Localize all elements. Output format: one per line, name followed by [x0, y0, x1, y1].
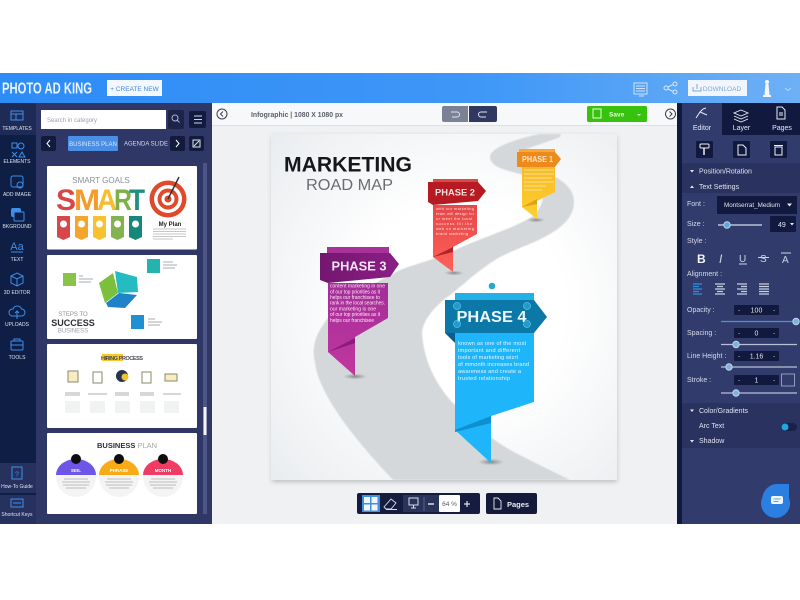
canvas workspace: [212, 103, 682, 524]
opacity control: 100: [751, 308, 762, 314]
opacity control: Opacity :: [687, 307, 715, 314]
stroke control: [687, 374, 797, 396]
alignment row: [687, 271, 769, 294]
thumbnail: hiring process: HIRING PROCESS: [101, 356, 143, 362]
thumbnail: smart goals: T: [129, 184, 145, 217]
font row: [687, 196, 797, 214]
line height control: [687, 351, 797, 370]
rail item: shortcut keys: [0, 495, 36, 524]
thumbnail: smart goals: [47, 166, 197, 250]
scrollbar: [203, 163, 207, 514]
style row: U: [739, 254, 746, 265]
download button: DOWNLOAD: [703, 86, 741, 93]
rail item: 3d editor: 3D EDITOR: [4, 290, 31, 296]
tab: pages: Pages: [772, 125, 792, 132]
thumbnail: smart goals: A: [97, 184, 117, 217]
undo button: [442, 106, 468, 122]
icon: chevron: [785, 88, 791, 90]
thumbnail: business plan: PHRASE: [110, 468, 128, 473]
section headers: [682, 163, 800, 193]
spacing control: 0: [755, 330, 759, 338]
rail item: templates: [2, 111, 32, 132]
phase 2 marker: [428, 179, 486, 276]
tab: editor: Editor: [693, 125, 712, 132]
prev arrow: [41, 136, 56, 151]
rail item: tools: TOOLS: [9, 355, 26, 361]
thumbnail: steps to success: [47, 255, 197, 339]
top header bar: [0, 73, 800, 103]
redo button: [469, 106, 497, 122]
style row: I: [719, 252, 723, 266]
phase 3 marker: PHASE 3: [332, 258, 386, 274]
phase 4 marker: [445, 283, 547, 466]
phase 3 marker: helps our franchisee to: [330, 295, 380, 301]
tabs: [693, 103, 800, 135]
color and shadow sections: Color/Gradients: [699, 408, 749, 415]
thumbnail: business plan: BUSINESS PLAN: [97, 441, 157, 450]
rail item: text: TEXT: [11, 257, 23, 263]
icon: share: [664, 82, 677, 94]
phase 2 marker: team will design for: [436, 211, 475, 216]
pages button: Pages: [507, 500, 529, 509]
back button: [217, 109, 227, 119]
stroke control: -: [773, 378, 776, 384]
search button: [168, 110, 184, 129]
font row: Montserrat_Medium: [724, 202, 780, 209]
style row: B: [697, 252, 706, 266]
thumbnail: hiring process: [47, 344, 197, 428]
canvas toolbar: [212, 103, 677, 126]
template panel: [36, 103, 212, 524]
category tab active: BUSINESS PLAN: [69, 142, 117, 148]
thumbnail: business plan: [47, 433, 197, 514]
phase 3 marker: our marketing is one: [330, 306, 376, 312]
size row: [687, 216, 796, 232]
phase 4 marker: known as one of the most: [458, 341, 526, 347]
line height control: -: [773, 354, 776, 360]
phase 3 marker: of our top priorities as it: [330, 290, 381, 296]
color and shadow sections: [682, 403, 800, 448]
infographic card: [271, 134, 617, 482]
phase 3 marker: of our top priorities as it: [330, 312, 381, 318]
tool: copy: [733, 141, 750, 158]
thumbnail: smart goals: M: [74, 184, 100, 217]
rail item: uploads: UPLOADS: [5, 322, 30, 328]
presentation icon: [403, 495, 453, 512]
bottom zoom toolbar: [357, 493, 537, 514]
forward button: [666, 109, 676, 119]
phase 2 marker: PHASE 2: [435, 188, 475, 198]
create new button: [107, 80, 162, 96]
next arrow: [170, 136, 185, 151]
phase 4 marker: of mmonth increases brand: [458, 362, 529, 368]
right properties panel: [682, 103, 800, 524]
resize button: [189, 136, 204, 151]
thumbnail: smart goals: S: [56, 184, 76, 217]
phase 1 marker: PHASE 1: [522, 155, 553, 164]
zoom value: [439, 495, 460, 512]
opacity control: [687, 305, 799, 325]
phase 4 marker: important and different: [458, 348, 520, 354]
title: MARKETING: [284, 152, 412, 176]
phase 3 marker: content marketing in one: [330, 284, 385, 290]
thumbnail: smart goals: My Plan: [159, 222, 182, 228]
icon: comments: [634, 83, 647, 96]
save button: [587, 106, 647, 122]
opacity control: -: [738, 308, 741, 314]
tool: delete: [770, 141, 787, 158]
spacing control: -: [773, 330, 776, 338]
section headers: Text Settings: [699, 184, 740, 191]
phase 3 marker: rank in the local searches.: [330, 300, 385, 306]
save button: Save: [609, 112, 625, 118]
stroke control: -: [738, 378, 741, 384]
thumbnail: steps to success: STEPS TO: [58, 312, 88, 318]
opacity control: -: [773, 308, 776, 314]
rail item: how-to guide: [0, 463, 36, 493]
thumbnail: smart goals: SMART GOALS: [72, 176, 130, 185]
zoom out: [428, 503, 434, 505]
category tab active: [68, 136, 118, 151]
thumbnail: business plan: MONTH: [155, 468, 171, 473]
phase 1 marker: [517, 149, 561, 222]
winding road: [314, 134, 574, 480]
phase 4 marker: awareness and create a: [458, 369, 522, 375]
rail item: templates: TEMPLATES: [2, 126, 32, 132]
rail item: tools: [9, 339, 26, 361]
rail item: background: BKGROUND: [3, 224, 32, 230]
thumbnail: steps to success: SUCCESS: [51, 318, 95, 328]
section headers: Position/Rotation: [699, 168, 752, 176]
left icon rail: [0, 103, 36, 524]
phase 4 marker: trusted relationship: [458, 376, 510, 382]
line height control: -: [738, 354, 741, 360]
rail item: uploads: [5, 306, 30, 328]
stroke control: 1: [755, 378, 759, 384]
rail item: shortcut keys: Shortcut Keys: [1, 512, 33, 518]
alignment row: Alignment :: [687, 271, 722, 278]
style row: A: [782, 255, 789, 266]
spacing control: [687, 328, 797, 348]
list button: [189, 111, 206, 128]
phase 2 marker: success fill the: [436, 221, 472, 226]
phase 3 marker: [320, 247, 399, 380]
rail item: add image: ADD IMAGE: [3, 192, 32, 198]
phase 2 marker: web on marketing: [436, 226, 474, 231]
selection handles: [454, 302, 530, 328]
style row: S: [760, 254, 767, 265]
chat button: [761, 484, 790, 518]
stroke control: Stroke :: [687, 377, 711, 384]
eraser icon: [384, 499, 397, 510]
thumbnail: smart goals: R: [114, 184, 132, 217]
tool: paint roller: [696, 141, 713, 158]
rail item: background: [3, 208, 32, 230]
category tab: AGENDA SLIDE: [124, 142, 168, 148]
rail item: how-to guide: How-To Guide: [1, 484, 33, 490]
size row: 49: [778, 222, 786, 229]
document title: Infographic | 1080 X 1080 px: [251, 112, 343, 119]
title: [284, 152, 412, 194]
style row: [687, 238, 791, 266]
grid toggle: [362, 495, 380, 512]
pages button: [486, 493, 537, 514]
thumbnail: steps to success: BUSINESS: [58, 328, 88, 334]
rail item: 3d editor: [4, 273, 31, 296]
rail item: text: [10, 241, 25, 263]
phase 4 marker: PHASE 4: [456, 309, 527, 326]
zoom value: 64 %: [442, 501, 457, 508]
rail item: elements: ELEMENTS: [4, 159, 31, 165]
spacing control: -: [738, 330, 741, 338]
download button: [688, 80, 747, 96]
tab: layer: Layer: [733, 125, 751, 132]
zoom in: [464, 501, 470, 507]
spacing control: Spacing :: [687, 330, 716, 337]
title: ROAD MAP: [306, 177, 393, 194]
search box: [41, 110, 166, 129]
rail item: add image: [3, 176, 32, 198]
size row: Size :: [687, 221, 705, 228]
phase 3 marker: helps our franchisee: [330, 318, 374, 324]
color and shadow sections: Arc Text: [699, 423, 724, 430]
logo: PHOTO AD KING: [2, 80, 92, 98]
line height control: 1.16: [750, 354, 763, 360]
font row: Font :: [687, 201, 705, 208]
line height control: Line Height :: [687, 353, 726, 360]
phase 2 marker: or meet the local: [436, 216, 472, 221]
style row: Style :: [687, 238, 707, 245]
phase 2 marker: with our marketing: [436, 206, 474, 211]
rail item: elements: [4, 143, 31, 165]
icon: user chess piece: [763, 80, 771, 97]
thumbnail: business plan: SEIL: [71, 468, 81, 473]
create new button: + CREATE NEW: [110, 86, 160, 93]
phase 2 marker: brand marketing: [436, 231, 468, 236]
phase 4 marker: tools of marketing wizrt: [458, 355, 518, 361]
rail item: how-to guide: ?: [15, 472, 19, 478]
rail item: text: Aa: [10, 241, 25, 253]
search box: Search in category: [47, 118, 97, 124]
color and shadow sections: Shadow: [699, 438, 725, 445]
